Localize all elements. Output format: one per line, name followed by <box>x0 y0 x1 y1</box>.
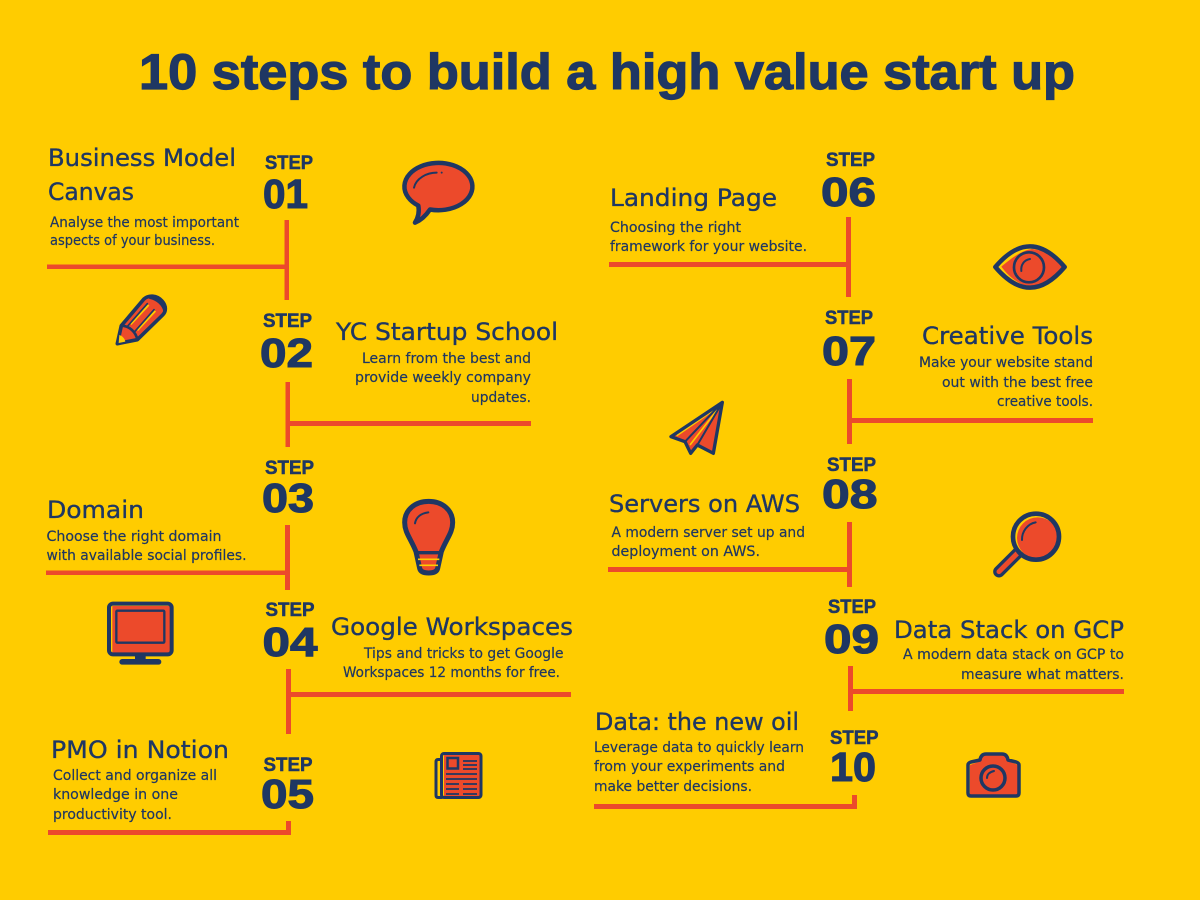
step 10 description: from your experiments and <box>594 759 785 775</box>
icon: newspaper <box>436 754 481 798</box>
icon: speech bubble <box>404 163 474 223</box>
step 05 description: knowledge in one <box>53 787 178 803</box>
step 02 number: STEP <box>263 311 312 332</box>
step 06 heading: Landing Page <box>610 184 777 212</box>
step 01 number: STEP <box>265 153 313 174</box>
step 01 connector <box>47 220 289 300</box>
step 01 <box>47 144 313 300</box>
step 03 description: with available social profiles. <box>46 548 246 564</box>
step 03 description: Choose the right domain <box>46 529 222 545</box>
step 05 description: Collect and organize all <box>53 768 217 784</box>
icon: light bulb <box>405 501 453 573</box>
step 05 number <box>261 755 314 817</box>
step 09 number: 09 <box>824 616 879 662</box>
step 03 number: 03 <box>262 475 314 521</box>
step 04 description <box>343 646 564 681</box>
icon: monitor <box>109 604 172 665</box>
step 06 <box>609 150 876 297</box>
step 05 number: 05 <box>261 771 314 817</box>
step 09 number <box>824 597 879 662</box>
step 06 number: 06 <box>821 169 876 215</box>
step 04 number: 04 <box>262 619 318 665</box>
step 03 heading: Domain <box>47 496 144 524</box>
step 02 description: updates. <box>471 390 531 406</box>
step 02 number <box>260 311 313 376</box>
step 07 description <box>919 355 1093 410</box>
step 03 description <box>46 529 246 564</box>
step 10 number <box>830 728 879 790</box>
step 02 description: Learn from the best and <box>362 351 531 367</box>
step 04 number <box>262 600 318 665</box>
icon: paper plane <box>671 402 722 453</box>
icon: camera <box>968 754 1019 796</box>
step 09 <box>824 597 1124 711</box>
step 01 number <box>263 153 313 217</box>
step 10 description <box>594 740 804 795</box>
step 05 <box>48 736 314 835</box>
step 07 number <box>822 308 876 374</box>
step 04 number: STEP <box>266 600 315 621</box>
step 07 heading: Creative Tools <box>922 322 1093 350</box>
step 04 connector <box>286 669 571 734</box>
step 07 description: out with the best free <box>942 375 1093 391</box>
step 04 <box>262 600 573 734</box>
step 04 heading: Google Workspaces <box>331 613 573 641</box>
step 10 number: STEP <box>830 728 879 749</box>
step 06 number <box>821 150 876 215</box>
step 08 number <box>822 455 878 517</box>
step 07 connector <box>847 379 1093 444</box>
step 05 heading: PMO in Notion <box>51 736 229 764</box>
step 06 description: Choosing the right <box>610 220 742 236</box>
step 08 description: deployment on AWS. <box>612 544 760 560</box>
step 01 heading: Business Model <box>48 144 236 172</box>
step 02 description: provide weekly company <box>355 370 531 386</box>
step 04 description: Workspaces 12 months for free. <box>343 665 560 681</box>
step 06 connector <box>609 217 851 297</box>
step 07 number: 07 <box>822 328 876 374</box>
step 08 description <box>612 525 805 560</box>
step 08 number: STEP <box>827 455 876 476</box>
step 05 connector <box>48 821 291 835</box>
step 02 <box>260 311 558 447</box>
step 03 <box>46 458 314 590</box>
step 05 description: productivity tool. <box>53 807 172 823</box>
step 08 connector <box>608 522 852 587</box>
step 05 description <box>53 768 217 823</box>
step 02 description <box>355 351 531 406</box>
step 06 description <box>610 220 807 255</box>
step 03 number: STEP <box>265 458 314 479</box>
step 03 number <box>262 458 314 521</box>
step 10 description: Leverage data to quickly learn <box>594 740 804 756</box>
icon: eye <box>995 246 1065 288</box>
step 05 number: STEP <box>264 755 313 776</box>
step 07 number: STEP <box>825 308 873 329</box>
step 06 number: STEP <box>826 150 875 171</box>
step 07 description: Make your website stand <box>919 355 1093 371</box>
step 09 description: measure what matters. <box>961 667 1124 683</box>
step 10 description: make better decisions. <box>594 779 752 795</box>
step 02 connector <box>286 382 531 447</box>
step 08 description: A modern server set up and <box>612 525 805 541</box>
step 01 description: aspects of your business. <box>50 233 215 249</box>
step 09 heading: Data Stack on GCP <box>894 616 1124 644</box>
step 08 <box>608 455 878 587</box>
step 10 number: 10 <box>830 744 876 790</box>
step 02 number: 02 <box>260 330 313 376</box>
step 09 description <box>903 647 1124 683</box>
step 10 heading: Data: the new oil <box>595 708 799 736</box>
title: 10 steps to build a high value start up <box>139 44 1075 100</box>
step 06 description: framework for your website. <box>610 239 807 255</box>
step 01 heading <box>48 144 236 206</box>
step 01 description <box>50 215 239 249</box>
step 01 description: Analyse the most important <box>50 215 239 231</box>
step 07 description: creative tools. <box>997 394 1093 410</box>
step 08 number: 08 <box>822 471 878 517</box>
step 10 connector <box>594 795 857 809</box>
step 08 heading: Servers on AWS <box>609 490 800 518</box>
step 10 <box>594 708 879 809</box>
icon: magnifying glass <box>999 514 1059 572</box>
step 03 connector <box>46 525 290 590</box>
step 09 connector <box>848 666 1124 711</box>
step 09 number: STEP <box>828 597 876 618</box>
step 09 description: A modern data stack on GCP to <box>903 647 1124 663</box>
step 01 heading: Canvas <box>48 178 134 206</box>
step 02 heading: YC Startup School <box>335 318 558 346</box>
step 04 description: Tips and tricks to get Google <box>363 646 564 662</box>
step 01 number: 01 <box>263 171 308 217</box>
step 07 <box>822 308 1093 444</box>
icon: pencil <box>117 296 165 344</box>
